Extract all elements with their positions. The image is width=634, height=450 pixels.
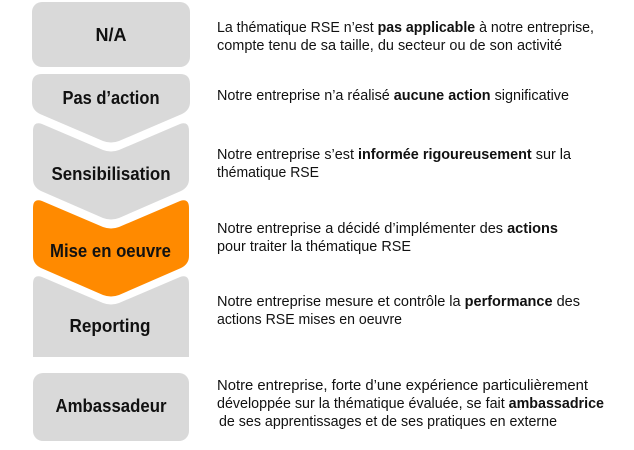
text block: Reporting description: Notre entreprise mesure et contrôle la performance des <box>217 294 580 310</box>
panel: N/A level <box>32 2 190 67</box>
text block: Mise en oeuvre description: pour traiter la thématique RSE <box>217 239 411 255</box>
text block: Mise en oeuvre description <box>217 221 558 255</box>
label: Mise en oeuvre: Mise en oeuvre <box>50 241 171 261</box>
label: Pas d'action: Pas d’action <box>62 88 160 108</box>
text block: Reporting description: actions RSE mises en oeuvre <box>217 312 402 328</box>
text block: Sensibilisation description <box>217 147 572 181</box>
text block: Ambassadeur description: Notre entreprise, forte d’une expérience particulièrement <box>217 378 588 394</box>
label: N/A: N/A <box>96 25 126 45</box>
text block: N/A description: La thématique RSE n’est pas applicable à notre entreprise, <box>217 20 594 36</box>
panel: Reporting level <box>33 276 189 357</box>
text block: Ambassadeur description: développée sur la thématique évaluée, se fait ambassadrice <box>217 396 604 412</box>
panel: Ambassadeur level <box>33 373 189 441</box>
text block: Ambassadeur description <box>217 378 604 430</box>
text block: Sensibilisation description: thématique RSE <box>217 165 319 181</box>
text block: Mise en oeuvre description: Notre entreprise a décidé d’implémenter des actions <box>217 221 558 237</box>
label: Reporting: Reporting <box>70 316 150 336</box>
text block: Ambassadeur description: de ses apprentissages et de ses pratiques en externe <box>219 414 557 430</box>
text block: N/A description: compte tenu de sa taille, du secteur ou de son activité <box>217 38 562 54</box>
text block: Sensibilisation description: Notre entreprise s’est informée rigoureusement sur la <box>217 147 572 163</box>
text block: Reporting description <box>217 294 580 328</box>
label: Sensibilisation: Sensibilisation <box>52 164 170 184</box>
text block: Pas d'action description: Notre entreprise n’a réalisé aucune action significative <box>217 88 569 104</box>
panel: Pas d'action level <box>32 74 190 142</box>
panel: Sensibilisation level <box>33 123 189 220</box>
label: Ambassadeur: Ambassadeur <box>56 396 166 416</box>
text block: N/A description <box>217 20 594 54</box>
panel: Mise en oeuvre level, highlighted <box>33 200 189 296</box>
